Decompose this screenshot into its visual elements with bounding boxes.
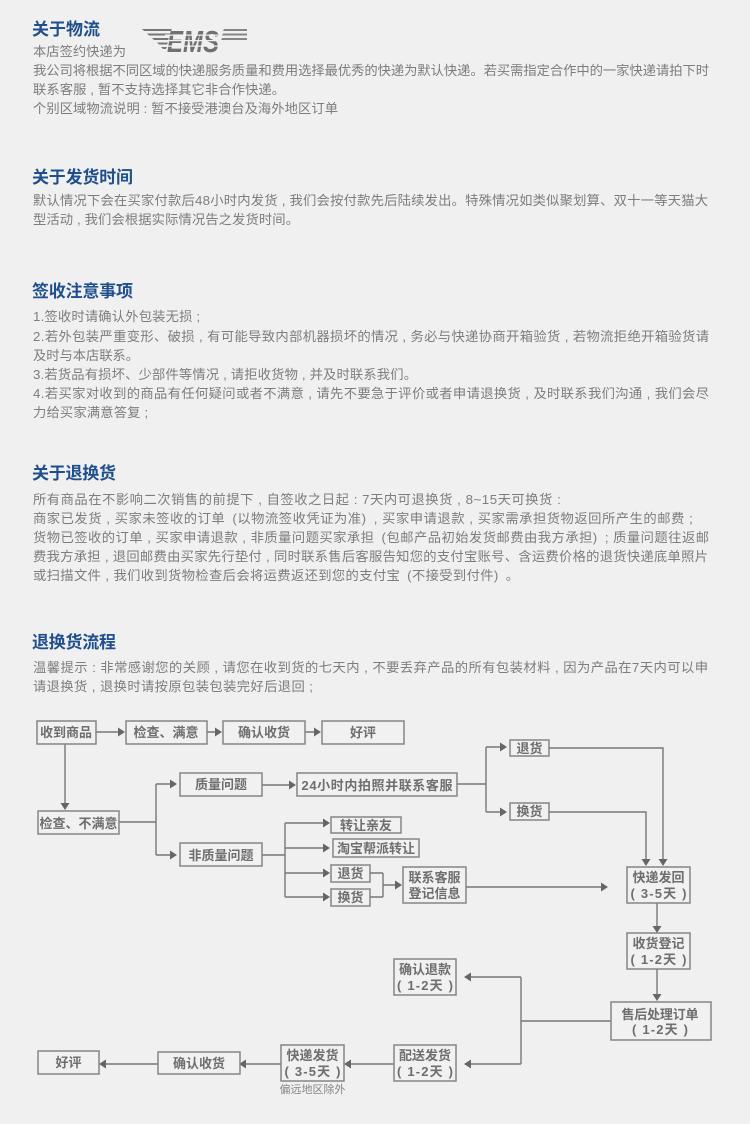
text: returns paragraph: 或扫描文件 , 我们收到货物检查后会将运费返还到您的支付宝 (不接受到付件) 。: [33, 567, 519, 583]
box: receipt registered: [627, 933, 690, 969]
box: dispatch: [394, 1045, 456, 1081]
box: return, upper: 退货: [516, 741, 543, 756]
box: confirm refund: 确认退款: [399, 962, 451, 977]
box: goods received: 收到商品: [40, 725, 92, 740]
box: confirm receipt, lower: 确认收货: [173, 1056, 225, 1071]
box: exchange, upper: [510, 803, 549, 820]
box: confirm receipt: 确认收货: [238, 725, 290, 740]
text: shipping time paragraph: 默认情况下会在买家付款后48小时内发货 , 我们会按付款先后陆续发出。特殊情况如类似聚划算、双十一等天猫大: [33, 192, 708, 208]
box: return, lower: 退货: [337, 866, 364, 881]
box: inspected, unsatisfied: 检查、不满意: [39, 816, 118, 831]
text: receipt notes list: 2.若外包装严重变形、破损 , 有可能导致内部机器损坏的情况 , 务必与快递协商开箱验货 , 若物流拒绝开箱验货请: [33, 328, 709, 344]
box: after-sales order processing: ( 1-2天 ): [632, 1022, 688, 1037]
box: exchange, upper: 换货: [516, 804, 543, 819]
box: non-quality issue: [180, 843, 262, 866]
section: logistics: [32, 20, 709, 116]
box: confirm receipt, lower: [158, 1052, 240, 1074]
heading: receipt notes: 签收注意事项: [32, 281, 133, 301]
text: return process tip: [33, 659, 708, 694]
icon: EMS logo: EMS: [167, 24, 219, 59]
text: returns paragraph: [33, 491, 709, 583]
box: non-quality issue: 非质量问题: [188, 848, 254, 863]
box: inspected, satisfied: [126, 721, 207, 744]
text: receipt notes list: 1.签收时请确认外包装无损 ;: [33, 308, 204, 324]
box: quality issue: 质量问题: [195, 777, 247, 792]
box: good review, lower: [38, 1051, 99, 1074]
section: return process: [32, 632, 708, 694]
text: logistics paragraph: 联系客服 , 暂不支持选择其它非合作快递。: [33, 81, 285, 97]
box: exchange, lower: [331, 889, 370, 906]
box: good review: [322, 721, 404, 744]
text: receipt notes list: 4.若买家对收到的商品有任何疑问或者不满意 , 请先不要急于评价或者申请退换货 , 及时联系我们沟通 , 我们会尽: [33, 385, 709, 401]
box: confirm refund: [394, 959, 456, 995]
box: quality issue: [180, 773, 262, 796]
box: exchange, lower: 换货: [337, 890, 364, 905]
box: return, lower: [331, 865, 370, 882]
section: returns: [32, 463, 709, 583]
box: return, upper: [510, 740, 549, 756]
box: inspected, satisfied: 检查、满意: [133, 725, 199, 740]
text: return process tip: 温馨提示 : 非常感谢您的关顾 , 请您在收到货的七天内 , 不要丢弃产品的所有包装材料 , 因为产品在7天内可以申: [33, 659, 708, 675]
box: goods received: [37, 721, 96, 744]
text: receipt notes list: [33, 308, 709, 420]
box: receipt registered: 收货登记: [632, 936, 685, 951]
box: inspected, unsatisfied: [38, 811, 119, 834]
box: courier return: ( 3-5天 ): [630, 886, 686, 901]
box: courier shipment: [281, 1045, 344, 1081]
section: shipping time: [32, 167, 708, 227]
box: receipt registered: ( 1-2天 ): [630, 952, 686, 967]
heading: returns: 关于退换货: [32, 463, 116, 483]
box: courier return: 快递发回: [632, 870, 685, 885]
text: shipping time paragraph: [33, 192, 708, 227]
box: courier shipment: 快递发货: [286, 1048, 339, 1063]
text: courier intro: 本店签约快递为: [33, 43, 126, 59]
text: receipt notes list: 力给买家满意答复 ;: [33, 404, 152, 420]
box: transfer to friend: 转让亲友: [340, 818, 392, 833]
text: receipt notes list: 3.若货品有损坏、少部件等情况 , 请拒收货物 , 并及时联系我们。: [33, 366, 417, 382]
flowchart: return process: [37, 721, 711, 1096]
text: receipt notes list: 及时与本店联系。: [33, 348, 139, 363]
text: returns paragraph: 费我方承担 , 退回邮费由买家先行垫付 , 同时联系售后客服告知您的支付宝账号、含运费价格的退货快递底单照片: [33, 548, 708, 564]
heading: shipping time: 关于发货时间: [32, 167, 133, 187]
box: after-sales order processing: 售后处理订单: [622, 1007, 698, 1022]
box: contact service: 联系客服: [408, 870, 461, 885]
heading: logistics: 关于物流: [32, 20, 100, 39]
box: contact service: 登记信息: [408, 886, 461, 901]
box: confirm refund: ( 1-2天 ): [397, 978, 453, 993]
section: receipt notes: [32, 281, 709, 420]
box: courier shipment: ( 3-5天 ): [284, 1064, 340, 1079]
box: courier return: [627, 867, 690, 903]
box: dispatch: ( 1-2天 ): [397, 1064, 453, 1079]
text: returns paragraph: 货物已签收的订单 , 买家申请退款 , 非质量问题买家承担 (包邮产品初始发货邮费由我方承担) ; 质量问题往返邮: [33, 529, 709, 545]
box: photograph within 24 hours: [297, 773, 457, 796]
text: return process tip: 请退换货 , 退换时请按原包装包装完好后退回 ;: [33, 678, 317, 694]
box: good review: 好评: [350, 725, 376, 740]
box: transfer to friend: [331, 817, 401, 833]
box: contact service: [403, 867, 466, 903]
text: returns paragraph: 所有商品在不影响二次销售的前提下 , 自签收之日起 : 7天内可退换货 , 8~15天可换货 :: [33, 491, 565, 507]
icon: EMS logo: [142, 24, 247, 59]
heading: return process: 退换货流程: [32, 632, 116, 652]
text: returns paragraph: 商家已发货 , 买家未签收的订单 (以物流签收凭证为准) , 买家申请退款 , 买家需承担货物返回所产生的邮费 ;: [33, 510, 697, 526]
note: remote areas excluded: 偏远地区除外: [280, 1082, 346, 1096]
box: good review, lower: 好评: [55, 1055, 82, 1070]
box: taobao transfer: 淘宝帮派转让: [337, 841, 415, 856]
text: logistics paragraph: [33, 62, 709, 116]
text: logistics paragraph: 个别区域物流说明 : 暂不接受港澳台及海外地区订单: [33, 100, 338, 116]
arrows: flowchart connectors: [60, 728, 668, 1068]
text: logistics paragraph: 我公司将根据不同区域的快递服务质量和费用选择最优秀的快递为默认快递。若买需指定合作中的一家快递请拍下时: [33, 62, 709, 78]
box: dispatch: 配送发货: [399, 1048, 451, 1063]
box: photograph within 24 hours: 24小时内拍照并联系客服: [302, 778, 452, 793]
box: after-sales order processing: [611, 1002, 711, 1040]
box: confirm receipt: [223, 721, 305, 744]
text: shipping time paragraph: 型活动 , 我们会根据实际情况告之发货时间。: [33, 211, 299, 227]
